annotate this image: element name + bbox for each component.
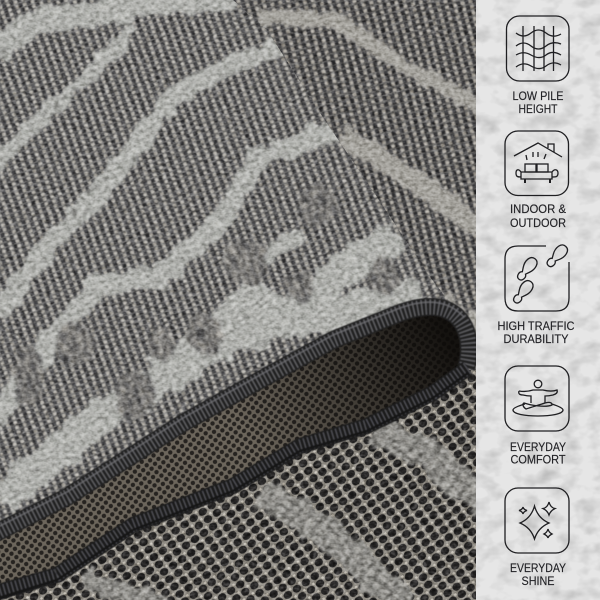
feature: everyday comfort: COMFORT (510, 452, 566, 466)
feature: indoor and outdoor (505, 131, 568, 230)
feature: indoor and outdoor: OUTDOOR (510, 216, 566, 230)
label: indoor and outdoor: INDOOR & (510, 202, 566, 216)
upper binding edge of the rug (0, 302, 469, 535)
label: everyday shine: EVERYDAY (510, 561, 566, 575)
feature: everyday shine: SHINE (522, 574, 554, 588)
rolled rug top surface (0, 0, 480, 540)
icon: house with sofa (505, 131, 568, 196)
label: everyday comfort: EVERYDAY (510, 440, 566, 454)
icon: meditating person (505, 366, 569, 431)
bottom rug surface (0, 370, 490, 600)
underside of the fold (0, 315, 460, 584)
feature: everyday shine (505, 488, 569, 588)
texture overlay: woven fibre (0, 0, 480, 600)
icon: sparkles (505, 488, 569, 553)
feature: low pile height (506, 16, 569, 116)
side panel: frosted strip (476, 0, 600, 600)
icon: footprints (505, 243, 570, 311)
lower binding edge of the rug (0, 368, 468, 600)
feature: high traffic durability (498, 243, 575, 346)
label: low pile height: LOW PILE (512, 89, 564, 103)
icon: low pile weave (506, 16, 569, 81)
feature: low pile height: HEIGHT (518, 102, 558, 116)
feature: high traffic durability: DURABILITY (504, 332, 568, 346)
label: high traffic durability: HIGH TRAFFIC (498, 319, 575, 333)
background rug behind the fold (234, 0, 476, 370)
feature: everyday comfort (505, 366, 569, 466)
dark woven patches (13, 185, 399, 421)
